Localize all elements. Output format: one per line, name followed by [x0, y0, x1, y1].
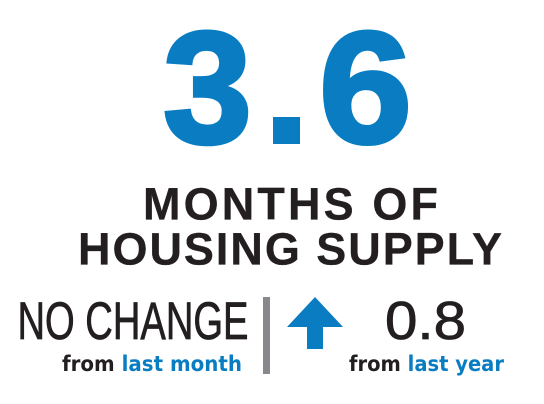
stat caption: from last month: from last month [62, 352, 242, 376]
main figure: 3.6 [163, 0, 412, 176]
heading: months of housing supply: MONTHS OF [143, 178, 438, 230]
icon: up arrow [287, 297, 343, 349]
heading: months of housing supply [78, 178, 502, 274]
vertical divider [263, 297, 270, 374]
right stat: 0.8 from last year [349, 291, 505, 376]
main figure: 3.6: 3 [163, 0, 252, 176]
stat value: no change: NO CHANGE [18, 292, 248, 351]
main figure: 3.6: 6 [319, 0, 412, 176]
heading: months of housing supply: HOUSING SUPPLY [78, 224, 502, 274]
left stat: no change from last month [18, 292, 248, 376]
stat caption: from last year: from last year [349, 352, 505, 376]
stat value: 0.8: 0.8 [385, 291, 466, 351]
